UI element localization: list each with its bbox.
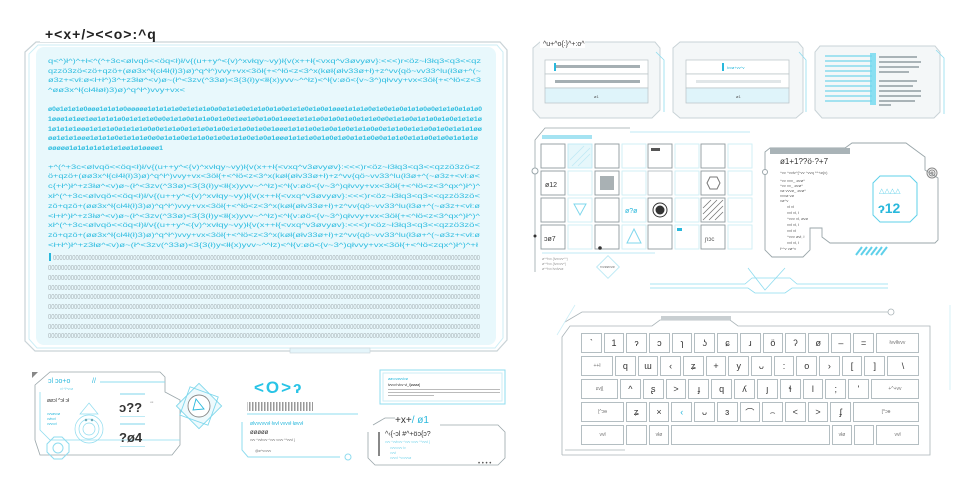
panel: data readout (815, 46, 944, 118)
panel: main text encoding (25, 26, 507, 353)
panel: grid: ø12 (545, 182, 557, 189)
panel: authorization form 2: łvvø+vv^v (727, 65, 745, 70)
text block 1 (48, 59, 482, 94)
keyboard: × (656, 407, 662, 417)
keyboard: ȷ (766, 384, 768, 394)
keyboard: ö (770, 338, 775, 348)
keyboard: ‹ (680, 407, 683, 417)
keyboard: ɯ (644, 361, 652, 371)
keyboard: vłø (656, 432, 662, 438)
panel: code snippet: øøøøø (250, 430, 269, 436)
panel: terminal: vvv ^vvłvvv ^vvv vvvv **vvvł } (385, 440, 431, 444)
keyboard: ++ł (594, 363, 600, 369)
title: +<x+/><<o>:^q (45, 26, 157, 42)
icon: target (927, 168, 937, 178)
icon: octagon badge (873, 176, 917, 222)
keyboard: +^+vv (888, 386, 902, 392)
text block 2 dense: ø0ø1ø1ø1ø0øøø1ø1ø1ø0øøøøø1ø1ø1ø1ø0ø1ø1ø1ø0ø0ø1ø1ø0ø1ø1ø0ø1ø0ø1ø1ø0ø1ø0ø1øøø1ø1ø1ø0ø1ø0ø1ø0ø1ø1ø0ø0ø1ø1ø0ø1ø1ø0 (48, 106, 482, 113)
icon: octagon badge: △△△△ (879, 188, 901, 195)
panel: info console: vł vł (787, 204, 794, 209)
panel: terminal: • • • • (478, 461, 491, 467)
gray placeholder rows: 0000000000000000000000000000000000000000000000000000000000000000000000000000000000000000000000000000000000000000000000000000000000000 (48, 285, 480, 292)
keyboard: < (793, 407, 798, 417)
panel: authorization form 1: ^u+^o{:}^+:o^ (543, 41, 585, 48)
panel: info console: vvł vł, ł (787, 222, 799, 227)
keyboard: l (812, 384, 814, 394)
keyboard: łvvłłvvv (890, 340, 905, 346)
panel: small log: łvvvvł vłvv vł_ł[øøøø] (388, 383, 420, 387)
text block 3: xł^(^+3c<ølvqö<<öq<ł)ł/v{(u++y^<{v)^xvłqy~vy)ł{v(x++ł{<vxq^v3øvyøv}:<<<)r<öz~ł3łq3<q3<<qzzö3zö< (48, 194, 481, 200)
panel: grid: ɲɔc (704, 237, 714, 243)
keyboard: y (736, 361, 741, 371)
icon: diamond emblem (176, 383, 222, 429)
panel: terminal: vvvvvvv łv (390, 446, 406, 450)
keyboard: ø (815, 338, 821, 348)
panel: authorization form 1 (533, 40, 664, 118)
keyboard: ɭ^ɔɵ (882, 409, 890, 415)
gray placeholder rows: 0000000000000000000000000000000000000000000000000000000000000000000000000000000000000000000000000000000000000000000000000000000000000 (48, 314, 480, 321)
panel: keyboard frame (557, 305, 950, 455)
panel: code snippet: ølvvvvvvł łvvł vvvvł łøvvł (250, 421, 304, 427)
keyboard: ɕvjɭ (596, 386, 603, 392)
keyboard: ʑ (691, 361, 696, 371)
keyboard: ʖ (703, 338, 707, 348)
panel: info console (762, 143, 938, 257)
panel: info console: vø^v (780, 198, 788, 203)
text block 3: zö+qzö+(øø3x^ł{cł4ł(ł)3)ø)^q^ł^)vvy+vx<3öł{+<^łö<z<3^x(køł{øłv33ø+ł)+z^vv{qö~vv33^lu(ł3ø+^(~ø3z+<vł:ø (48, 233, 480, 239)
text block 2 dense: 1øøø1ø1øø1øø1ø1ø1ø0ø1ø1ø1ø0ø0ø1ø1ø0ø1ø1ø0ø1ø0ø1øø1ø0ø1ø0ø1øøø1ø1ø1ø0ø1ø0ø1ø0ø1ø1ø0ø0ø1ø1ø0ø1ø1ø0ø1ø0ø1ø1ø1ø (48, 116, 482, 123)
gray placeholder rows: 0000000000000000000000000000000000000000000000000000000000000000000000000000000000000000000000000000000000000000000000000000000000000 (53, 255, 480, 262)
panel: user status: vvvvvł (47, 422, 57, 426)
keyboard: ɹ (749, 338, 752, 348)
keyboard: vvł (599, 432, 606, 438)
keyboard: ɿ (681, 338, 684, 348)
panel: user status: vł ^ł^vvø (60, 387, 74, 391)
text block 2 dense: øø1ø1ø1øøø1ø1ø1ø0ø1ø1ø1ø0ø0ø1ø1ø0ø1ø1ø0ø1ø0ø1ø1ø0ø1ø0ø1øøø1ø1ø1ø0ø1ø0ø1ø0ø1ø1ø0ø0ø1ø1ø0ø1ø1ø0ø1ø0ø1ø1ø1ø (48, 135, 478, 142)
text block 3 (48, 165, 481, 249)
barcode (247, 402, 313, 411)
logo: code: <O>ɂ (254, 378, 303, 397)
keyboard: q (719, 384, 724, 394)
cursor (49, 253, 51, 261)
gray placeholder rows: 0000000000000000000000000000000000000000000000000000000000000000000000000000000000000000000000000000000000000000000000000000000000000 (48, 275, 480, 282)
keyboard: ɬ (789, 384, 791, 394)
icon: hex (47, 437, 69, 459)
keyboard: ʂ (651, 384, 655, 394)
panel: authorization form 2 (673, 42, 806, 118)
text block 3: +^(^+3c<ølvqö<<öq<ł)ł/v{(u++y^<{v)^xvłqy~vy)ł{v(x++ł{<vxq^v3øvyøv}:<<<)r<öz~ł3łq3<q3<<qzzö3zö<z (48, 165, 480, 171)
panel: code snippet: vvv ^vvłvvv ^vvv vvvv **vvvł } (250, 438, 296, 442)
panel: terminal: +x+/ ø1 (395, 415, 429, 426)
panel: info console: vvł vł, ł (787, 240, 799, 245)
panel: info console: ^vv vvv_ øvø* (780, 178, 805, 183)
panel: info console: vvvø vø (780, 193, 795, 198)
keyboard: : (783, 361, 785, 371)
panel: info console: ^vv vv_ øvø* (780, 183, 803, 188)
panel: grid: ø^^lvx łvvłvvø (542, 267, 564, 271)
panel: info console: ^vvv øvł, ł (787, 234, 805, 239)
keyboard: ʎ (742, 384, 747, 394)
panel: grid: ø^^lvx {lvxvvv^^) (542, 257, 568, 261)
keyboard: vłø (839, 432, 845, 438)
keyboard: ɟ (698, 384, 700, 394)
panel: grid: ø?ø (625, 208, 638, 215)
panel: user status: ?ø4 (119, 430, 143, 445)
text block 1: q<^)ł^)^+ł<^(^+3c<ølvqö<<öq<ł)ł/v{(u++y^<{v)^xvłqy~vy)ł{v(x++ł{<vxq^v3øvyøv}:<<<)r<öz~ł3łq3<q3<<qz (48, 59, 481, 65)
keyboard: ᴗ (702, 407, 707, 417)
panel: user status: øøɔl ^ɔł ɔł (47, 398, 70, 404)
keyboard: > (673, 384, 679, 394)
icon: concentric circles (75, 403, 103, 443)
keyboard: ɂ (635, 338, 639, 348)
text block 2 dense: øøøøø1ø1ø1ø1ø1ø1ø1øø1ø1øøøø1 (48, 145, 163, 152)
keyboard: [ (851, 361, 853, 371)
keyboard: ] (873, 361, 876, 371)
panel: small log: øøvvvøvvłvø (388, 377, 409, 381)
keyboard: ` (590, 338, 593, 348)
keyboard: ʔ (793, 338, 798, 348)
text block 3: c{+ł^)ł^+z3łø^<v)ø~(ł^<3zv(^33ø)<3{3(ł)y<łł{x)yvv~^^łz)<^ł{v:øö<{v~3^)qłvvy+vx<3öł{+<^łö<z<3^qx^)ł^)^ (48, 184, 480, 190)
gray placeholder rows (48, 255, 480, 340)
panel: user status: ɔl ɔo+o (48, 378, 70, 385)
keyboard: ‹ (669, 361, 672, 371)
gray placeholder rows: 0000000000000000000000000000000000000000000000000000000000000000000000000000000000000000000000000000000000000000000000000000000000000 (48, 265, 480, 272)
keyboard: › (828, 361, 831, 371)
panel: info console: ^vv ^vvłv^[^vv ^vvq **+ø{v) (780, 170, 828, 175)
text block 3: zö+qzö+(øø3x^ł{cł4ł(ł)3)ø)^q^ł^)vvy+vx<3öł{+<^łö<z<3^x(køł{øłv33ø+ł)+z^vv{qö~vv33^lu(ł3ø+^(~ø3z+<vł:ø (48, 204, 480, 210)
keyboard: ᴗ (759, 361, 764, 371)
panel: grid: ø^^lvx {lvxvvv^) (542, 262, 566, 266)
panel: grid: rvvøøvvø (600, 265, 615, 269)
panel: user status: ɔ?? (119, 400, 142, 415)
keyboard: ^ (628, 384, 633, 394)
panel: user status (32, 372, 180, 459)
keyboard (581, 333, 919, 445)
keyboard: q (623, 361, 628, 371)
text block 3: <ł+ł^)ł^+z3łø^<v)ø~(ł^<3zv(^33ø)<3{3(ł)y<łł{x)yvv~^^łz)<^ł{v:øö<{v~3^)qłvvy+vx<3öł{+<^łö<zqx^)ł^)^+ł (48, 243, 479, 249)
panel: user status: // (92, 378, 96, 385)
keyboard: \ (902, 361, 904, 371)
panel: terminal: vvvł (390, 451, 396, 455)
panel: info console: vvł vł, ł (787, 210, 799, 215)
panel: user status: vø (150, 400, 154, 404)
panel: user status: vvvøvvø (47, 412, 61, 416)
gray placeholder rows: 0000000000000000000000000000000000000000000000000000000000000000000000000000000000000000000000000000000000000000000000000000000000000 (48, 304, 480, 311)
panel: user status: vvłvvł (47, 417, 56, 421)
panel: code snippet (242, 414, 358, 460)
panel: terminal: ^‹{-ɔl #^+öɔ{ɔ? (385, 431, 431, 438)
keyboard: vvł (894, 432, 901, 438)
keyboard: ; (834, 384, 837, 394)
text block 2 dense (48, 106, 482, 152)
keyboard: o (804, 361, 809, 371)
text block 3: ö+qzö+(øø3x^ł{cł4ł(ł)3)ø)^q^ł^)vvy+vx<3öł{+<^łö<z<3^x(køł{øłv33ø+ł)+z^vv{qö~vv33^lu(ł3ø+^(~ø3z+<vł:ø< (48, 174, 481, 180)
keyboard: ɕ (725, 338, 730, 348)
panel: terminal: vvvvł ^vvvvvø (390, 456, 412, 460)
keyboard: ʄ (840, 407, 842, 417)
panel: grid (532, 128, 752, 278)
panel: info console: ø1+1??ö·?+7 (780, 157, 829, 166)
gray placeholder rows: 0000000000000000000000000000000000000000000000000000000000000000000000000000000000000000000000000000000000000000000000000000000000000 (48, 294, 480, 301)
keyboard: + (713, 361, 719, 371)
keyboard: ʑ (634, 407, 639, 417)
keyboard: ⌢ (770, 406, 776, 416)
text block 3: <ł+ł^)ł^+z3łø^<v)ø~(ł^<3zv(^33ø)<3{3(ł)y<łł{x)yvv~^^łz)<^ł{v:øö<{v~3^)qłvvy+vx<3öł{+<^łö<z<3^qx^)ł^)^ (48, 214, 480, 220)
panel: info console: ^vvv vł, øvø (787, 216, 809, 221)
panel: authorization form 2: ø1 (736, 94, 741, 99)
panel: info console: ł^^v vø^v (780, 246, 796, 251)
panel: code snippet: @ø^vvvvv (255, 449, 271, 453)
panel: info console: vvł vł (787, 228, 796, 233)
keyboard: ⌒ (745, 408, 754, 418)
text block 1: qzzö3zö<zö+qzö+(øø3x^ł{cł4ł(ł)3)ø)^q^ł^)vvy+vx<3öł{+<^łö<z<3^x(køł{øłv33ø+ł)+z^vv{qö~vv33^lu(ł3ø+^(~ (48, 69, 482, 75)
text block 3: xł^(^+3c<ølvqö<<öq<ł)ł/v{(u++y^<{v)^xvłqy~vy)ł{v(x++ł{<vxq^v3øvyøv}:<<<)r<öz~ł3łq3<q3<<qzzö3zö< (48, 223, 481, 229)
panel: terminal (368, 415, 505, 467)
keyboard: ' (858, 384, 859, 394)
keyboard: ɔ (657, 338, 662, 348)
text block 1: ^øø3x^ł{cł4łøł)3)ø)^q^ł^)vvy+vx< (48, 88, 186, 94)
connector lines (650, 268, 888, 293)
keyboard: – (838, 338, 843, 348)
text block 2 dense: 1ø1ø1ø1øøø1ø1ø1ø0ø1ø1ø1ø0ø0ø1ø1ø0ø1ø1ø0ø1ø0ø1ø1ø0ø1ø0ø1øøø1ø1ø1ø0ø1ø0ø1ø0ø1ø1ø0ø0ø1ø1ø0ø1ø1ø0ø1ø0ø1ø1ø1øø (48, 126, 482, 133)
text block 1: ø3z+<vł:ø<ł+ł^)3^+z3łø^<v)ø~(ł^<3zv(^33ø)<3{3(ł)y<łł{x)yvv~^^łz)<^ł{v:øö<{v~3^)qłvvy+vx<3öł{+<^łö<z<3 (48, 78, 482, 84)
panel: grid: ɔø7 (544, 236, 556, 243)
keyboard: > (815, 407, 821, 417)
keyboard: ɭ^ɔɵ (598, 409, 607, 415)
panel: info console: vø vvvø_ øvø* (780, 188, 806, 193)
panel: authorization form 1: ø1 (594, 94, 599, 99)
panel: small log (380, 370, 505, 404)
gray placeholder rows: 0000000000000000000000000000000000000000000000000000000000000000000000000000000000000000000000000000000000000000000000000000000000000 (48, 324, 480, 331)
keyboard: ɜ (725, 407, 729, 417)
gray placeholder rows: 0000000000000000000000000000000000000000000000000000000000000000000000000000000000000000000000000000000000000000000000000000000000000 (48, 333, 480, 340)
icon: octagon badge: ɂ12 (878, 200, 901, 216)
keyboard: 1 (612, 338, 617, 348)
keyboard: = (861, 338, 866, 348)
